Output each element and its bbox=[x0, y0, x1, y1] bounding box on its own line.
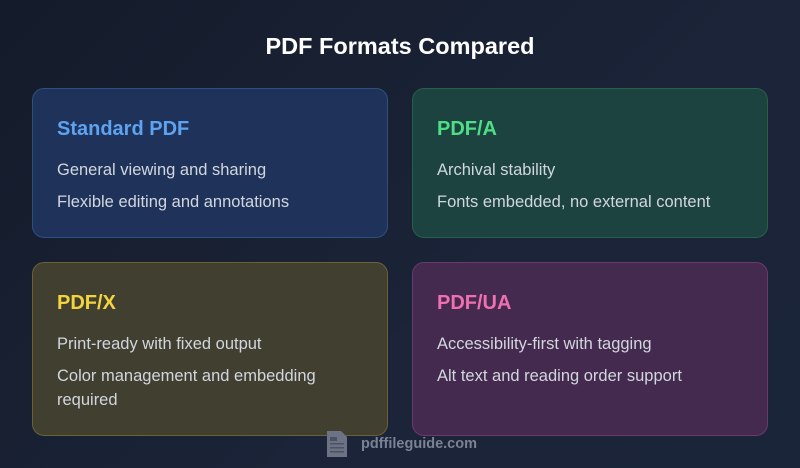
panel: pdf/x bbox=[32, 262, 388, 436]
text: pdf/x points: Print-ready with fixed output bbox=[57, 335, 262, 353]
text: site: pdffileguide.com bbox=[361, 436, 477, 452]
text: standard pdf points: Flexible editing and annotations bbox=[57, 193, 289, 211]
heading: pdf/a: PDF/A bbox=[437, 118, 497, 140]
text: pdf/x points bbox=[57, 335, 316, 409]
text: standard pdf points bbox=[57, 161, 289, 211]
icon: document bbox=[327, 431, 347, 457]
text: standard pdf points: General viewing and sharing bbox=[57, 161, 266, 179]
panel: pdf/ua bbox=[412, 262, 768, 436]
heading: standard pdf: Standard PDF bbox=[57, 118, 189, 140]
text: pdf/a points bbox=[437, 161, 710, 211]
panel: standard pdf bbox=[32, 88, 388, 238]
text: pdf/ua points: Alt text and reading order support bbox=[437, 367, 682, 385]
heading: pdf/ua: PDF/UA bbox=[437, 292, 511, 314]
heading: pdf/x: PDF/X bbox=[57, 292, 116, 314]
title: PDF Formats Compared bbox=[266, 33, 534, 59]
text: pdf/a points: Archival stability bbox=[437, 161, 555, 179]
footer: logo bbox=[327, 431, 477, 457]
panel: pdf/a bbox=[412, 88, 768, 238]
text: pdf/ua points bbox=[437, 335, 682, 385]
text: pdf/a points: Fonts embedded, no external content bbox=[437, 193, 710, 211]
text: pdf/x points: Color management and embedding required bbox=[57, 367, 316, 409]
text: pdf/ua points: Accessibility-first with tagging bbox=[437, 335, 652, 353]
